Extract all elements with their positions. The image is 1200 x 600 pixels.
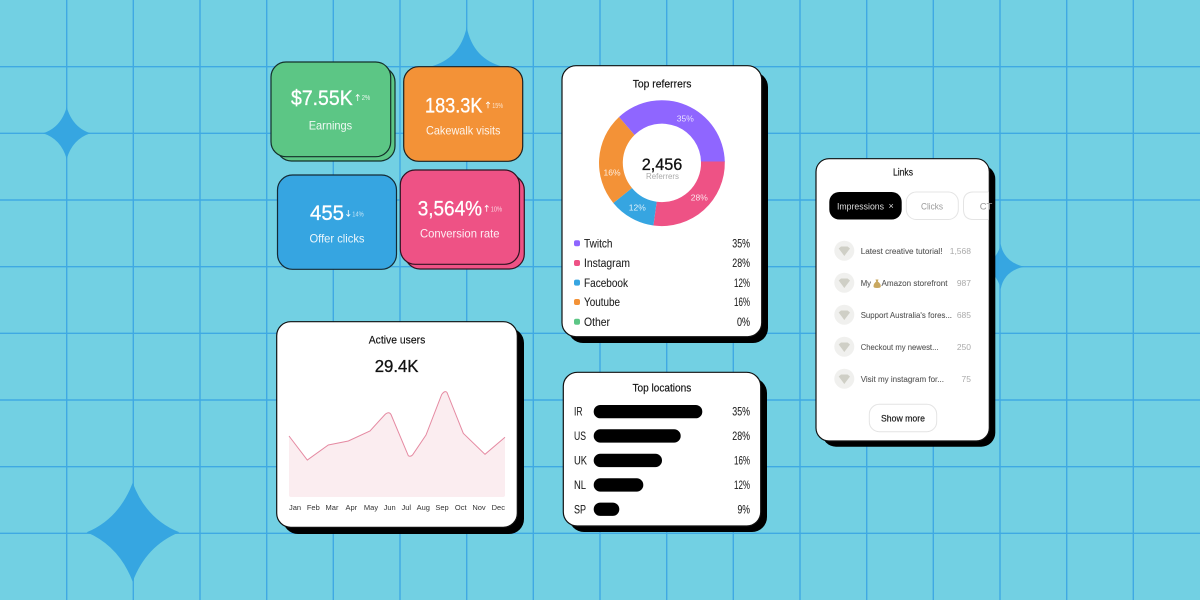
show more button: Show more: [881, 414, 925, 425]
link row 1: 1,568: [950, 246, 971, 256]
tab: impressions: [829, 192, 902, 220]
earnings value: $7.55K: [291, 87, 353, 110]
location bars: IR: [574, 405, 583, 419]
panel: conversion rate card: [400, 170, 524, 269]
location bars: US: [574, 429, 586, 443]
link row 1: Latest creative tutorial!: [861, 246, 942, 256]
tab: clicks: [906, 192, 958, 220]
link row 3: [834, 305, 971, 325]
legend: Twitch: [584, 236, 612, 250]
top locations heading: Top locations: [632, 383, 692, 395]
icon: sparkle star top: [430, 27, 503, 106]
panel: earnings card: [271, 62, 395, 161]
location bars: 9%: [738, 502, 750, 516]
month axis labels: Oct: [455, 503, 467, 512]
legend: 28%: [732, 256, 750, 270]
panel: cakewalk visits card: [404, 67, 523, 161]
cakewalk change: 15%: [492, 101, 503, 110]
legend: Other: [584, 315, 610, 329]
legend: Instagram: [584, 256, 630, 270]
active users heading: Active users: [369, 334, 426, 346]
offer clicks value: 455: [310, 202, 344, 225]
tab: impressions: ×: [888, 201, 894, 211]
offer clicks change: 14%: [352, 210, 364, 218]
month axis labels: Sep: [435, 503, 449, 512]
location bars: [574, 405, 750, 516]
link row 5: Visit my instagram for...: [861, 374, 944, 384]
panel: top locations: [563, 372, 767, 532]
offer clicks label: Offer clicks: [310, 231, 364, 245]
month axis labels: [289, 503, 505, 512]
donut label Instagram: 28%: [691, 193, 708, 203]
location bars: NL: [574, 478, 586, 492]
link row 2: 987: [957, 278, 971, 288]
location bars: 16%: [734, 454, 750, 468]
location bars: SP: [574, 502, 586, 516]
link row 3: 685: [957, 310, 971, 320]
month axis labels: Jun: [384, 503, 396, 512]
tab: impressions: Impressions: [837, 202, 884, 212]
donut label Facebook: 12%: [629, 203, 646, 213]
icon: sparkle star bottom left: [87, 483, 179, 582]
icon: sparkle star right: [977, 244, 1024, 289]
month axis labels: Jan: [289, 503, 301, 512]
location bars: 28%: [732, 429, 750, 443]
link row 4: Checkout my newest...: [861, 342, 938, 352]
earnings label: Earnings: [309, 118, 352, 132]
cakewalk label: Cakewalk visits: [426, 123, 500, 137]
link row 2: My: [861, 278, 872, 288]
donut chart: [599, 100, 725, 226]
month axis labels: Nov: [472, 503, 486, 512]
top referrers heading: Top referrers: [633, 78, 692, 90]
link row 1: [834, 241, 971, 261]
month axis labels: Jul: [402, 503, 411, 512]
tab: CTR clipped: [964, 192, 993, 220]
show more button: [869, 404, 937, 432]
legend: 16%: [734, 295, 750, 309]
link row 2: [834, 273, 971, 293]
panel: active users: [277, 322, 524, 534]
month axis labels: Feb: [307, 503, 320, 512]
conversion change: 10%: [491, 204, 502, 213]
link row 3: Support Australia's fores...: [861, 310, 952, 320]
location bars: UK: [574, 454, 587, 468]
month axis labels: May: [364, 503, 378, 512]
legend: Youtube: [584, 295, 620, 309]
conversion value: 3,564%: [418, 198, 482, 221]
link row 4: [834, 337, 971, 357]
legend: 35%: [732, 236, 750, 250]
donut caption: Referrers: [646, 171, 679, 181]
month axis labels: Dec: [492, 503, 505, 512]
conversion label: Conversion rate: [420, 226, 500, 240]
donut label Youtube: 16%: [603, 167, 621, 177]
area chart: [289, 392, 505, 497]
location bars: 12%: [734, 478, 750, 492]
icon: sparkle star left: [43, 107, 90, 159]
legend: [574, 236, 750, 329]
link row 2: Amazon storefront: [882, 278, 948, 288]
legend: 0%: [737, 315, 750, 329]
cakewalk value: 183.3K: [425, 95, 482, 118]
link row 4: 250: [957, 342, 971, 352]
tab: CTR clipped: CT: [980, 202, 993, 212]
month axis labels: Aug: [417, 503, 430, 512]
month axis labels: Apr: [345, 503, 358, 512]
panel: links: [816, 159, 995, 447]
icon: money bag: [874, 280, 881, 288]
panel: offer clicks card: [278, 175, 396, 269]
tab: clicks: Clicks: [921, 202, 943, 212]
active users value: 29.4K: [375, 356, 419, 376]
month axis labels: Mar: [326, 503, 339, 512]
donut total: 2,456: [642, 156, 682, 174]
legend: 12%: [734, 276, 750, 290]
link row 5: [834, 369, 971, 389]
location bars: 35%: [732, 405, 750, 419]
link row 5: 75: [962, 374, 971, 384]
donut label Twitch: 35%: [677, 113, 694, 123]
panel: top referrers: [562, 66, 768, 343]
legend: Facebook: [584, 276, 629, 290]
earnings change: 2%: [362, 93, 370, 102]
links heading: Links: [893, 168, 913, 179]
